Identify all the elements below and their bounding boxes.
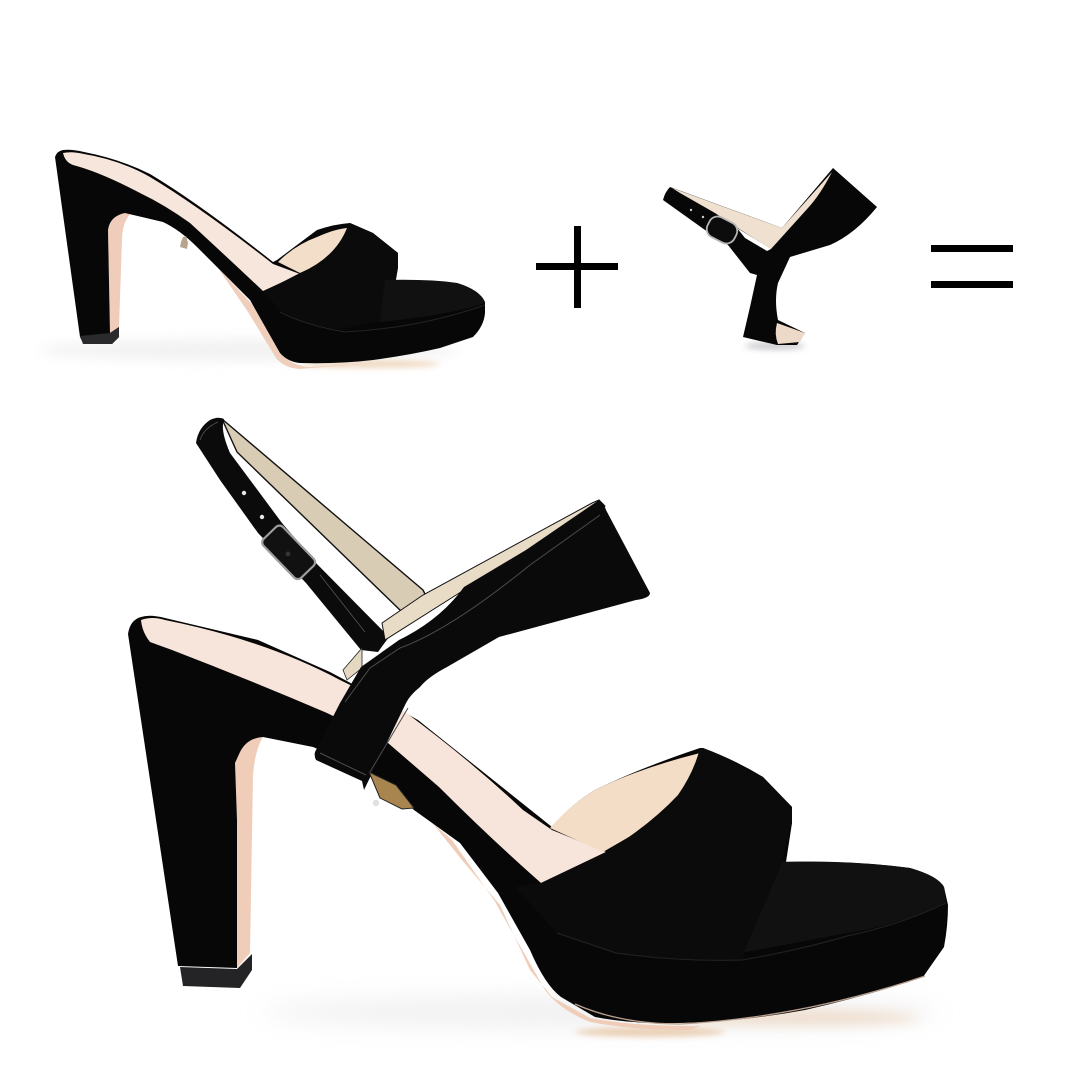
plus sign [536, 226, 618, 308]
buckle [260, 524, 317, 581]
ground shadow [260, 996, 940, 1037]
inner heel pink [108, 213, 130, 333]
interior lining [550, 753, 700, 852]
footbed [735, 862, 946, 954]
footbed [380, 280, 485, 322]
strap lining [672, 172, 832, 249]
insole [141, 618, 606, 883]
inner heel pink [235, 737, 263, 968]
heel tip [80, 327, 119, 344]
back strap lining [222, 419, 426, 612]
insole [63, 152, 300, 291]
mule silhouette [55, 150, 485, 363]
back strap with buckle [196, 418, 389, 652]
platform seam [557, 903, 946, 960]
wide strap lining [382, 500, 605, 640]
gap behind strap [737, 228, 771, 251]
mule shoe [40, 150, 485, 369]
hardware charm [180, 236, 188, 249]
sandal silhouette [128, 616, 948, 1023]
vamp band [515, 748, 792, 960]
detachable strap [663, 168, 877, 350]
pink sole edge [400, 795, 700, 1030]
heel tip [180, 954, 252, 988]
sole [776, 323, 805, 344]
buckle [704, 213, 740, 247]
combined sandal [128, 418, 948, 1037]
hardware under strap [369, 772, 414, 809]
interior lining [278, 228, 347, 273]
lower strap lining sliver [343, 648, 362, 680]
wide front strap [315, 500, 650, 790]
vamp band [263, 223, 398, 329]
pink sole edge [218, 268, 372, 369]
equals sign [931, 245, 1013, 288]
